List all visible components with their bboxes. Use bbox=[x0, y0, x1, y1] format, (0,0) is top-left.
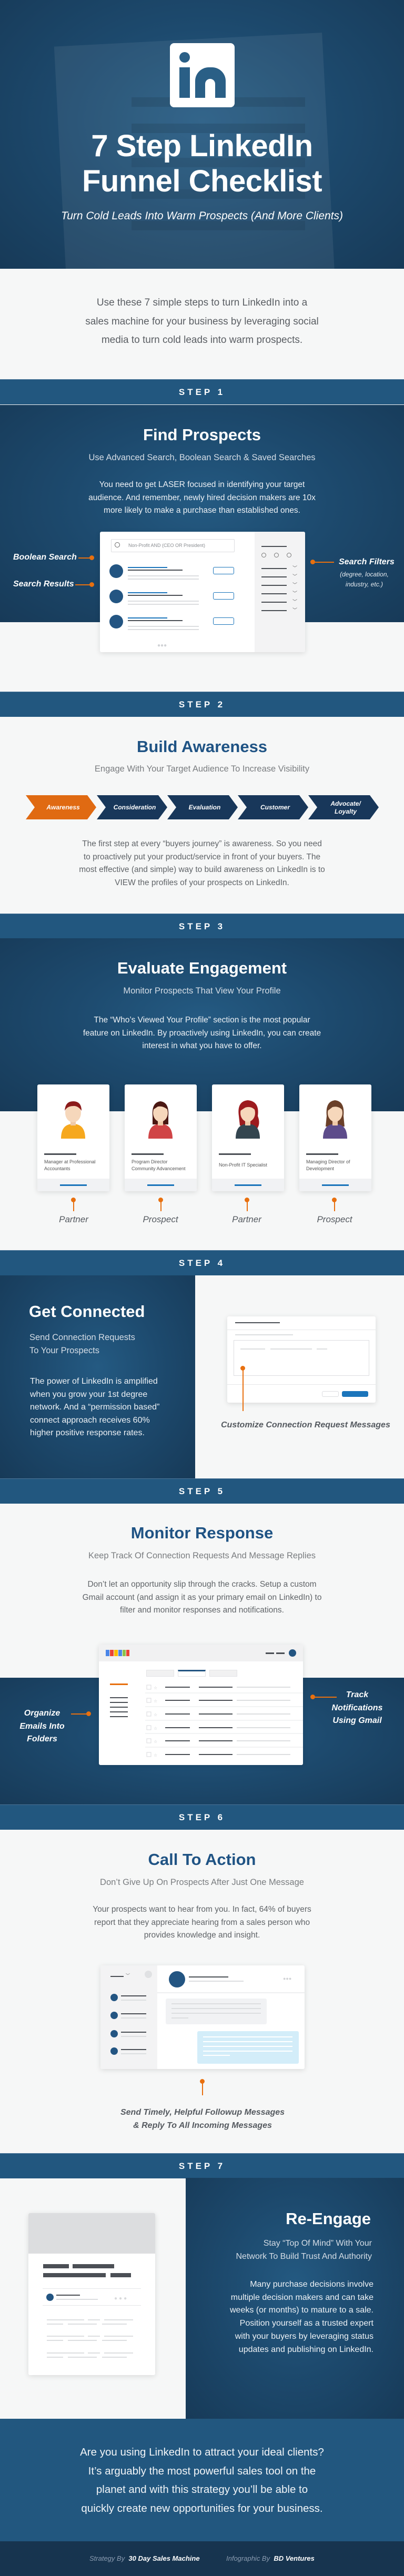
text block bbox=[93, 1905, 311, 1940]
callout: Boolean Search: Boolean Search bbox=[13, 553, 77, 562]
chevron funnel: Loyalty bbox=[335, 808, 357, 815]
post mockup bbox=[28, 2213, 155, 2375]
card labels: Prospect bbox=[143, 1214, 178, 1224]
text block: report that they appreciate hearing from a sales person who bbox=[94, 1918, 310, 1927]
text block: most effective (and simple) way to build awareness on LinkedIn is to bbox=[79, 865, 325, 874]
search mockup: ●●● bbox=[157, 643, 167, 648]
chevron funnel: Evaluation bbox=[189, 804, 220, 811]
step 2 band bbox=[0, 692, 404, 717]
step 5 band: STEP 5 bbox=[179, 1486, 225, 1496]
text block: when you grow your 1st degree bbox=[30, 1390, 147, 1399]
text block: Don’t let an opportunity slip through the cracks. Setup a custom bbox=[87, 1580, 317, 1589]
step 4 band bbox=[0, 1250, 404, 1275]
subtitle: Turn Cold Leads Into Warm Prospects (And More Clients) bbox=[61, 210, 343, 222]
search mockup: ﹀ bbox=[292, 574, 297, 579]
heading: Find Prospects bbox=[143, 425, 261, 444]
subheading: Don’t Give Up On Prospects After Just One Message bbox=[100, 1878, 304, 1887]
card labels: Prospect bbox=[317, 1214, 352, 1224]
text block: Position yourself as a trusted expert bbox=[240, 2319, 373, 2328]
search mockup: ﹀ bbox=[292, 599, 297, 604]
text block: The first step at every “buyers journey” is awareness. So you need bbox=[82, 839, 322, 848]
callout: organize emails bbox=[19, 1709, 91, 1743]
connection request mockup bbox=[227, 1316, 376, 1403]
gmail mockup: ☆ bbox=[154, 1739, 157, 1744]
text block: network. And a “permission based” bbox=[30, 1403, 159, 1412]
step 4 band: STEP 4 bbox=[179, 1258, 225, 1268]
heading: Get Connected bbox=[29, 1302, 145, 1321]
gmail mockup: ☆ bbox=[154, 1726, 157, 1731]
gmail mockup: ☆ bbox=[154, 1712, 157, 1717]
callout: Search Results: Search Results bbox=[13, 580, 74, 589]
chevron funnel: Customer bbox=[260, 804, 290, 811]
text block bbox=[230, 2280, 373, 2354]
panel: step 5 bbox=[0, 1524, 404, 1804]
title bbox=[82, 129, 322, 198]
title: 7 Step LinkedIn bbox=[91, 129, 313, 163]
profile card 4: Development bbox=[306, 1166, 334, 1171]
card labels: Partner bbox=[59, 1214, 88, 1224]
callout: organize emails: Organize bbox=[24, 1709, 60, 1718]
step 1 band bbox=[0, 379, 404, 404]
gmail mockup bbox=[99, 1645, 303, 1765]
callout: followup messages bbox=[120, 2079, 285, 2130]
text block: It’s arguably the most powerful sales tool on the bbox=[88, 2465, 316, 2477]
search mockup: ﹀ bbox=[292, 565, 297, 571]
callout: track notifications: Notifications bbox=[332, 1703, 382, 1712]
step 3 band: STEP 3 bbox=[179, 921, 225, 931]
step 6 band: STEP 6 bbox=[179, 1812, 225, 1822]
step 5 band bbox=[0, 1478, 404, 1504]
post mockup: ●●● bbox=[114, 2296, 128, 2301]
subheading: Network To Build Trust And Authority bbox=[236, 2252, 372, 2261]
subheading: Use Advanced Search, Boolean Search & Saved Searches bbox=[88, 453, 316, 462]
text block: interest in what you have to offer. bbox=[142, 1041, 262, 1050]
text block: provides knowledge and insight. bbox=[144, 1931, 260, 1940]
messaging mockup bbox=[100, 1965, 305, 2069]
gmail mockup: ☆ bbox=[154, 1753, 157, 1758]
panel: step 4 left bbox=[0, 1275, 195, 1478]
panel: step 2 bbox=[26, 737, 379, 887]
profile card 2: Community Advancement bbox=[132, 1166, 186, 1171]
subheading: Engage With Your Target Audience To Increase Visibility bbox=[95, 764, 309, 774]
callout: Search Filters: industry, etc.) bbox=[346, 581, 383, 588]
callout: track notifications: Using Gmail bbox=[332, 1716, 382, 1725]
text block bbox=[83, 1580, 321, 1615]
subheading: Monitor Prospects That View Your Profile bbox=[123, 986, 281, 996]
intro text: media to turn cold leads into warm prospects. bbox=[102, 334, 302, 346]
footer credits bbox=[0, 2541, 404, 2576]
messaging mockup: ﹀ bbox=[126, 1973, 130, 1978]
step 3 band bbox=[0, 914, 404, 939]
text block bbox=[80, 2446, 324, 2514]
profile card 3 bbox=[212, 1084, 284, 1191]
intro text: Use these 7 simple steps to turn LinkedIn into a bbox=[97, 297, 307, 308]
callout: followup messages: & Reply To All Incoming Messages bbox=[133, 2121, 272, 2130]
gmail mockup: ☆ bbox=[154, 1686, 157, 1690]
footer credits: Infographic By BD Ventures bbox=[226, 2554, 315, 2562]
heading: Evaluate Engagement bbox=[117, 959, 287, 977]
card labels bbox=[59, 1198, 352, 1224]
text block: quickly create new opportunities for your business. bbox=[81, 2502, 323, 2514]
text block: higher positive response rates. bbox=[30, 1428, 145, 1437]
callout: customize messages: Customize Connection Request Messages bbox=[221, 1421, 390, 1429]
profile card 1: Accountants bbox=[44, 1166, 70, 1171]
callout: Search Filters: Search Filters bbox=[339, 557, 395, 566]
search mockup: ﹀ bbox=[292, 582, 297, 587]
messaging mockup: ●●● bbox=[283, 1976, 291, 1981]
search mockup: ﹀ bbox=[292, 607, 297, 613]
text block: The power of LinkedIn is amplified bbox=[30, 1377, 158, 1386]
subheading bbox=[29, 1333, 135, 1355]
text block: multiple decision makers and can take bbox=[231, 2293, 373, 2302]
panel: conclusion bbox=[0, 2419, 404, 2541]
title: Funnel Checklist bbox=[82, 164, 322, 198]
profile card 4 bbox=[299, 1084, 371, 1191]
callout: track notifications bbox=[310, 1690, 382, 1725]
panel: step 6 bbox=[93, 1850, 311, 1940]
profile card 3: Non-Profit IT Specialist bbox=[219, 1162, 267, 1168]
heading: Monitor Response bbox=[131, 1524, 273, 1542]
heading: Build Awareness bbox=[137, 737, 267, 756]
panel: step 1 bbox=[0, 405, 404, 622]
text block bbox=[30, 1377, 159, 1437]
subheading: Stay “Top Of Mind” With Your bbox=[264, 2239, 372, 2248]
subheading: Keep Track Of Connection Requests And Message Replies bbox=[88, 1551, 316, 1560]
profile card 2 bbox=[125, 1084, 197, 1191]
chevron funnel bbox=[26, 795, 379, 819]
text block: more likely to make a purchase than established ones. bbox=[104, 506, 300, 515]
callout: Search Filters bbox=[310, 557, 395, 588]
text block: Are you using LinkedIn to attract your ideal clients? bbox=[80, 2446, 324, 2458]
profile card 1 bbox=[37, 1084, 109, 1191]
callout: customize messages bbox=[221, 1366, 390, 1429]
text block bbox=[83, 1016, 321, 1050]
chevron funnel: Advocate/ bbox=[330, 800, 361, 807]
gmail mockup: ☆ bbox=[154, 1699, 157, 1703]
step 7 band bbox=[0, 2153, 404, 2178]
profile card 4: Managing Director of bbox=[306, 1159, 350, 1164]
text block: Many purchase decisions involve bbox=[250, 2280, 373, 2289]
icon: LinkedIn logo bbox=[170, 43, 235, 107]
callout: organize emails: Folders bbox=[27, 1735, 57, 1743]
intro text bbox=[85, 297, 319, 346]
chevron funnel: Awareness bbox=[46, 804, 80, 811]
text block: Gmail account (and assign it as your primary email on LinkedIn) to bbox=[83, 1593, 321, 1602]
footer credits: Strategy By 30 Day Sales Machine bbox=[89, 2554, 200, 2562]
callout: Search Filters: (degree, location, bbox=[340, 571, 389, 578]
hero background bbox=[0, 0, 404, 269]
text block: weeks (or months) to mature to a sale. bbox=[230, 2306, 373, 2315]
panel: step 3 bbox=[0, 938, 404, 1111]
search mockup bbox=[100, 532, 305, 652]
heading: Re-Engage bbox=[286, 2209, 371, 2228]
text block: to proactively put your product/service in front of your buyers. The bbox=[84, 853, 320, 861]
subheading bbox=[236, 2239, 372, 2261]
text block: with your buyers by leveraging status bbox=[235, 2332, 373, 2341]
step 2 band: STEP 2 bbox=[179, 699, 225, 709]
step 1 band: STEP 1 bbox=[179, 387, 225, 397]
callout: track notifications: Track bbox=[346, 1690, 368, 1699]
text block: Your prospects want to hear from you. In fact, 64% of buyers bbox=[93, 1905, 311, 1914]
text block: planet and with this strategy you’ll be able to bbox=[96, 2483, 308, 2496]
text block: You need to get LASER focused in identifying your target bbox=[99, 480, 305, 489]
step 6 band bbox=[0, 1804, 404, 1830]
text block: audience. And remember, newly hired decision makers are 10x bbox=[88, 493, 316, 502]
callout: organize emails: Emails Into bbox=[19, 1722, 65, 1730]
panel: step 7 right bbox=[186, 2178, 404, 2419]
text block: feature on LinkedIn. By proactively using LinkedIn, you can create bbox=[83, 1029, 321, 1038]
heading: Call To Action bbox=[148, 1850, 256, 1869]
text block: The “Who’s Viewed Your Profile” section is the most popular bbox=[94, 1016, 310, 1025]
card labels: Partner bbox=[232, 1214, 261, 1224]
text block: filter and monitor responses and notifications. bbox=[120, 1606, 284, 1615]
search mockup: ﹀ bbox=[292, 591, 297, 596]
text block: connect approach receives 60% bbox=[30, 1416, 150, 1425]
text block bbox=[88, 480, 316, 515]
text block bbox=[79, 839, 325, 887]
intro text: sales machine for your business by leveraging social bbox=[85, 316, 319, 327]
callout: followup messages: Send Timely, Helpful Followup Messages bbox=[120, 2108, 285, 2117]
profile card 2: Program Director bbox=[132, 1159, 168, 1164]
text block: VIEW the profiles of your prospects on LinkedIn. bbox=[115, 878, 289, 887]
subheading: To Your Prospects bbox=[29, 1346, 99, 1355]
step 7 band: STEP 7 bbox=[179, 2161, 225, 2171]
subheading: Send Connection Requests bbox=[29, 1333, 135, 1342]
text block: updates and publishing on LinkedIn. bbox=[239, 2345, 373, 2354]
profile card 1: Manager at Professional bbox=[44, 1159, 96, 1164]
search mockup: Non-Profit AND (CEO OR President) bbox=[128, 543, 205, 548]
chevron funnel: Consideration bbox=[114, 804, 156, 811]
